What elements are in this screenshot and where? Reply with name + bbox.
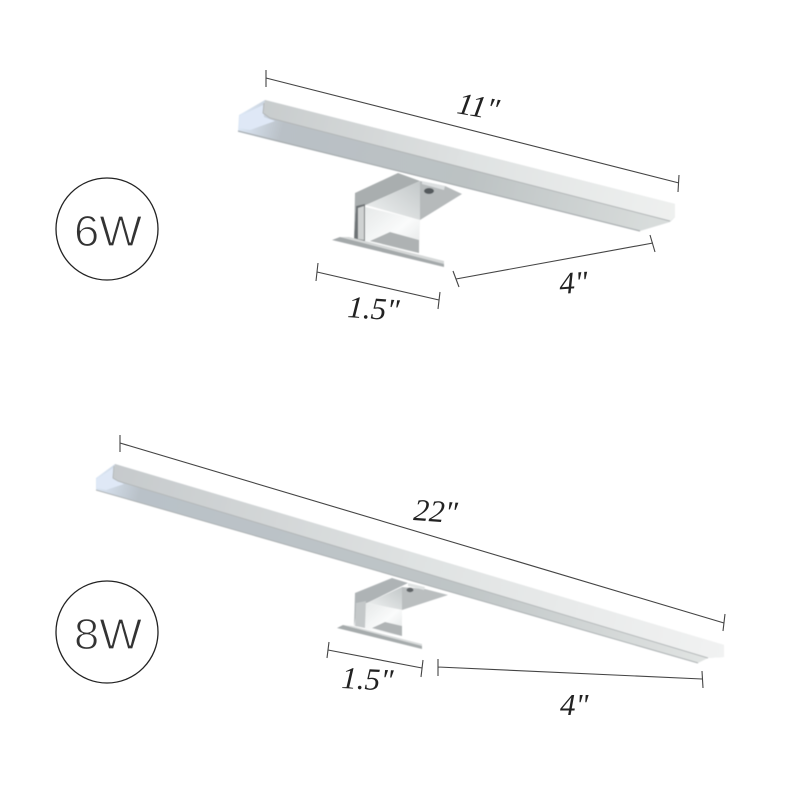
dimension line: 4 inch depth: [438, 659, 703, 688]
label: 1.5 inches: 1.5": [341, 660, 395, 698]
dimension line: 11 inch width: [266, 70, 679, 192]
lamp: 8W fixture: [96, 464, 724, 663]
dimension line: 1.5 inch base: [316, 263, 440, 309]
label: 22 inches: 22": [413, 492, 460, 530]
lamp body: [238, 100, 675, 231]
badge: 8W: [56, 581, 158, 683]
lamp arm bracket: [337, 578, 448, 649]
badge: 8W: 8W: [74, 610, 142, 659]
badge: 6W: 6W: [74, 207, 142, 256]
lamp: 6W fixture: [238, 100, 675, 267]
badge: 6W: [56, 178, 158, 280]
label: 11 inches: 11": [455, 85, 503, 127]
dimension line: 1.5 inch base: [327, 642, 423, 677]
label: 4 inches: 4": [558, 264, 590, 301]
label: 4 inches: 4": [560, 687, 590, 722]
lamp body: [96, 464, 724, 663]
label: 1.5 inches: 1.5": [347, 289, 402, 328]
dimension line: 4 inch depth: [453, 235, 655, 287]
dimension line: 22 inch width: [120, 435, 725, 631]
lamp arm bracket: [332, 173, 462, 267]
